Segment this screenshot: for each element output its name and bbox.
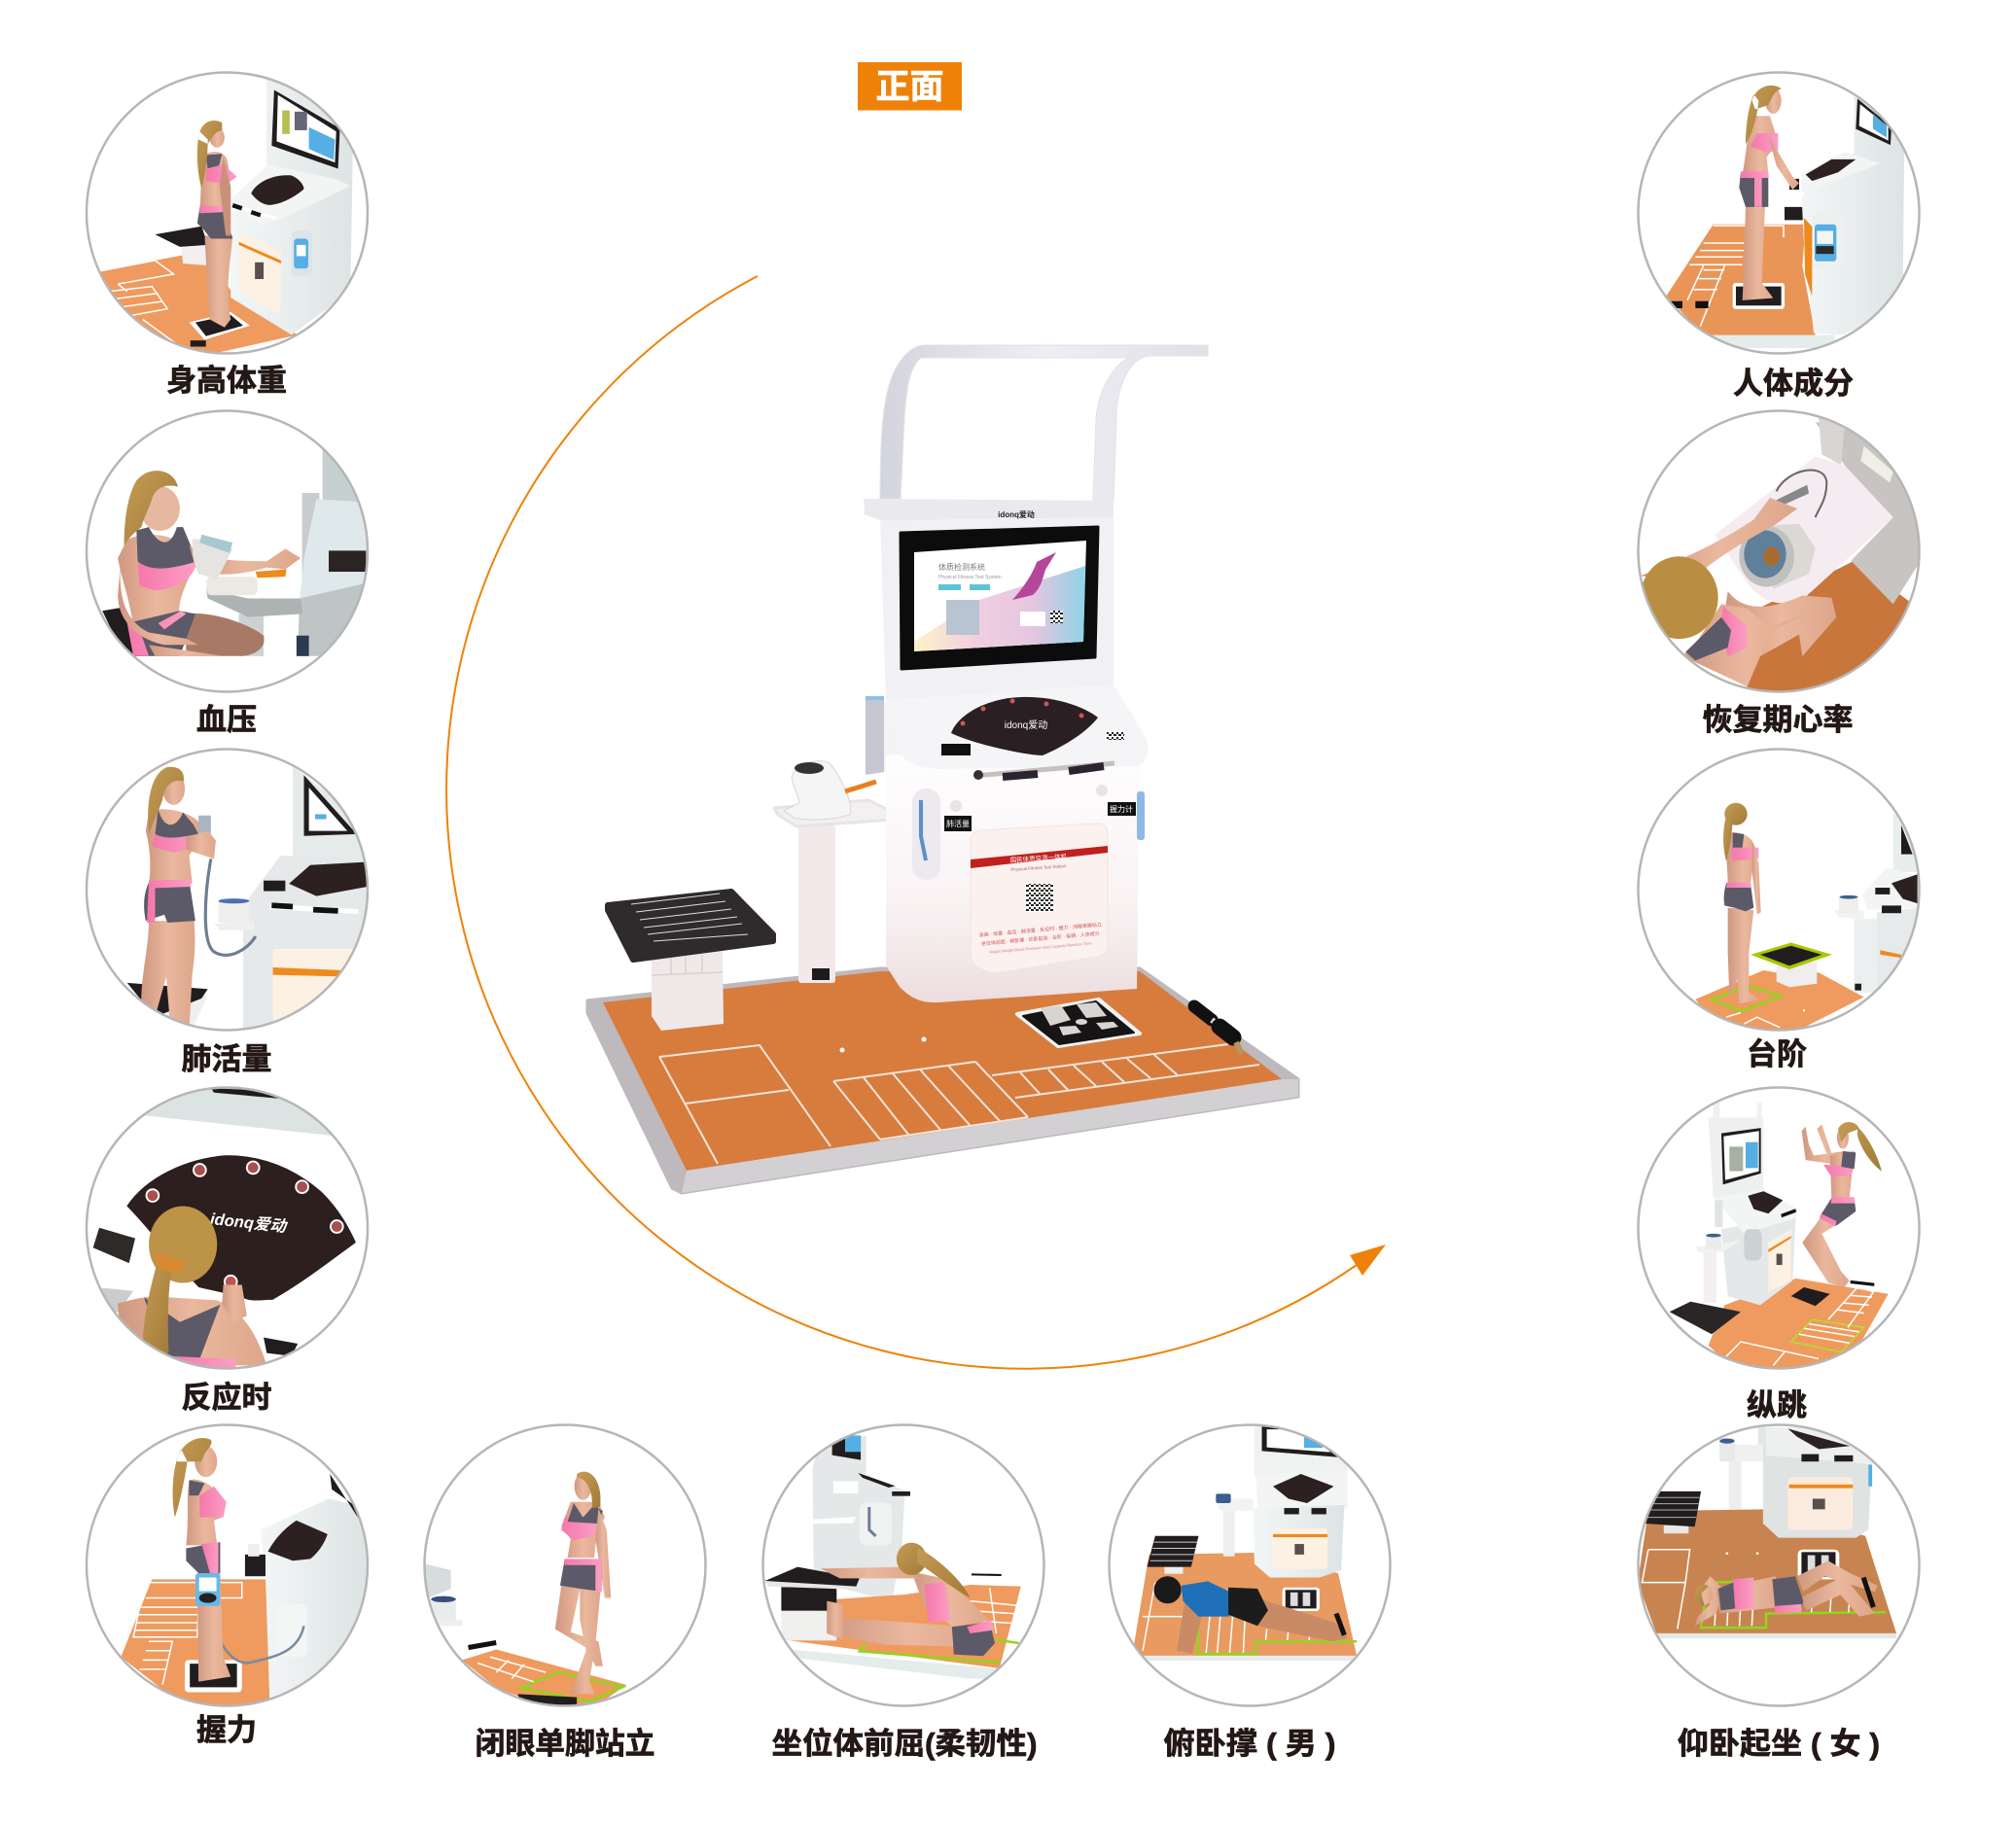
scene: blood pressure — [102, 449, 368, 656]
ring — [1638, 1425, 1920, 1705]
touch screen: Physical Fitness Test System — [938, 575, 1002, 580]
table — [1695, 1234, 1741, 1303]
label: 坐位体前屈(柔韧性) — [772, 1727, 1037, 1761]
badge: 正面: 正面 — [875, 68, 944, 106]
spirometer table — [205, 859, 256, 955]
step — [1785, 207, 1804, 220]
woman from above — [1641, 498, 1836, 686]
poster: 坐位体前屈 · 俯卧撑 · 仰卧起坐 · 台阶 · 纵跳 · 人体成分 — [981, 930, 1100, 947]
machine — [1709, 1102, 1797, 1305]
woman — [821, 1543, 995, 1656]
ring — [1638, 1087, 1920, 1369]
floor — [1132, 1553, 1359, 1661]
label: 血压 — [196, 703, 257, 737]
scene: vital capacity — [127, 766, 368, 1030]
step — [1148, 1536, 1198, 1574]
touch screen: 体质检测系统 — [938, 562, 985, 572]
touch screen — [901, 527, 1098, 669]
panel: 身高体重 — [87, 72, 368, 398]
floor — [785, 1574, 1021, 1679]
dynamometer hose — [223, 1626, 305, 1665]
arch canopy — [880, 345, 1208, 501]
woman seated — [118, 471, 301, 656]
machine — [245, 1474, 368, 1706]
machine — [1254, 1426, 1348, 1578]
label: 肺活量 — [181, 1042, 272, 1076]
ring — [87, 1425, 368, 1705]
panel: 仰卧起坐 — [1638, 1425, 1920, 1761]
device labels — [944, 802, 1136, 831]
table — [1214, 1493, 1254, 1557]
woman — [173, 1438, 230, 1682]
upper panel: idonq爱动 — [998, 509, 1035, 519]
scene: push up — [1132, 1426, 1359, 1661]
pulse sensor — [1777, 470, 1826, 517]
ring — [424, 1425, 706, 1705]
mat — [1798, 1550, 1839, 1579]
mat — [1283, 1588, 1320, 1611]
machine — [229, 78, 354, 334]
label: 闭眼单脚站立 — [475, 1727, 655, 1761]
ring — [87, 1087, 368, 1369]
machine — [1835, 814, 1921, 998]
label: 握力 — [196, 1713, 257, 1747]
machine underside — [1816, 417, 1921, 604]
panel: 肺活量 — [87, 749, 368, 1076]
poster: Height Weight Blood Pressure Vital Capacity Reaction Time — [989, 940, 1092, 955]
floor platform — [587, 968, 1298, 1193]
woman — [1723, 803, 1761, 1003]
black fan panel: idonq爱动 — [209, 1209, 289, 1236]
ring — [1638, 749, 1920, 1031]
step — [765, 1567, 860, 1640]
panel: 反应时 — [87, 1086, 368, 1415]
panel: 握力 — [87, 1425, 368, 1747]
step — [102, 608, 149, 656]
scene: step test — [1695, 803, 1921, 1033]
mat — [190, 312, 250, 347]
badge: 正面 — [858, 62, 962, 111]
console surface — [102, 1086, 347, 1313]
panel: 俯卧撑 — [1109, 1425, 1391, 1761]
label: 台阶 — [1747, 1037, 1807, 1071]
black fan panel — [125, 1155, 357, 1301]
ring — [1638, 72, 1920, 354]
ring — [87, 749, 368, 1031]
console: idonq爱动 — [1005, 719, 1047, 731]
device labels: 握力计 — [1110, 804, 1133, 814]
poster: Physical Fitness Test Station — [1010, 863, 1067, 872]
arc arrow — [446, 276, 1386, 1369]
machine — [1758, 1427, 1878, 1538]
cabinet body — [886, 754, 1140, 1002]
scene: reaction time — [93, 1086, 357, 1369]
machine — [802, 1436, 910, 1601]
machine — [297, 449, 368, 656]
scene: body composition — [1666, 86, 1904, 348]
woman jumping — [1802, 1122, 1882, 1287]
woman lying — [1695, 1560, 1878, 1626]
side box — [866, 696, 914, 775]
ring — [87, 410, 368, 692]
woman from behind — [118, 1206, 266, 1369]
machine — [1789, 96, 1904, 335]
floor — [100, 255, 296, 352]
table — [1718, 1438, 1763, 1509]
label: 恢复期心率 — [1702, 703, 1854, 737]
scene: recovery heart rate — [1641, 417, 1921, 691]
floor — [1638, 1509, 1896, 1638]
floor — [1695, 970, 1864, 1033]
spirometer pocket — [912, 789, 1145, 880]
panel: 纵跳 — [1638, 1087, 1920, 1422]
machine edge — [425, 1563, 463, 1626]
panel: 恢复期心率 — [1638, 410, 1921, 737]
device labels: 肺活量 — [946, 819, 970, 828]
man — [1154, 1576, 1348, 1654]
scene: sit and reach — [765, 1436, 1021, 1679]
step — [1670, 1302, 1741, 1334]
floor — [121, 1579, 269, 1709]
woman — [555, 1472, 611, 1694]
woman — [141, 767, 216, 1030]
ring — [1109, 1425, 1391, 1705]
card reader — [93, 1228, 135, 1263]
floor — [1709, 1279, 1889, 1372]
step stool — [608, 892, 773, 1031]
poster — [971, 824, 1108, 973]
step stool — [1751, 942, 1832, 987]
mat — [264, 1338, 298, 1356]
floor — [1741, 561, 1919, 691]
scene: sit up — [1638, 1427, 1896, 1638]
BP cuff device — [1739, 524, 1816, 589]
panel: 血压 — [87, 410, 368, 737]
scene: one-leg stand — [425, 1472, 626, 1707]
ring — [762, 1425, 1044, 1705]
central machine illustration — [587, 345, 1298, 1193]
label: 俯卧撑 ( 男 ) — [1163, 1727, 1336, 1761]
panel: 坐位体前屈 — [762, 1425, 1044, 1761]
upper panel — [864, 499, 1114, 702]
step — [1645, 1491, 1701, 1533]
step — [127, 983, 208, 1030]
panel: 台阶 — [1638, 749, 1921, 1071]
panel: 闭眼单脚站立 — [424, 1425, 706, 1761]
scene: height and weight — [99, 78, 354, 360]
mat and roller — [1670, 283, 1785, 309]
label: 身高体重 — [166, 364, 287, 398]
mat — [185, 1660, 242, 1692]
label: 仰卧起坐 ( 女 ) — [1678, 1727, 1880, 1761]
machine — [243, 766, 368, 1030]
panel: 人体成分 — [1638, 72, 1920, 401]
poster: 国民体质监测一体机 — [1009, 852, 1068, 864]
ring — [87, 72, 368, 354]
scene: vertical jump — [1670, 1102, 1889, 1372]
poster: 身高 · 体重 · 血压 · 肺活量 · 反应时 · 握力 · 闭眼单脚站立 — [978, 921, 1102, 939]
woman — [197, 121, 237, 328]
label: 纵跳 — [1747, 1388, 1807, 1422]
woman — [1739, 86, 1799, 300]
label: 反应时 — [181, 1381, 272, 1415]
console — [886, 684, 1148, 812]
floor — [1666, 225, 1835, 348]
floor — [462, 1649, 626, 1706]
ring — [1638, 410, 1920, 692]
table — [206, 570, 302, 656]
foot mat — [1017, 999, 1140, 1046]
roller — [1194, 1006, 1242, 1054]
scene: grip strength — [121, 1438, 368, 1709]
step — [155, 227, 208, 265]
white table — [1715, 457, 1893, 603]
label: 人体成分 — [1733, 367, 1854, 401]
blood pressure table — [774, 761, 906, 983]
